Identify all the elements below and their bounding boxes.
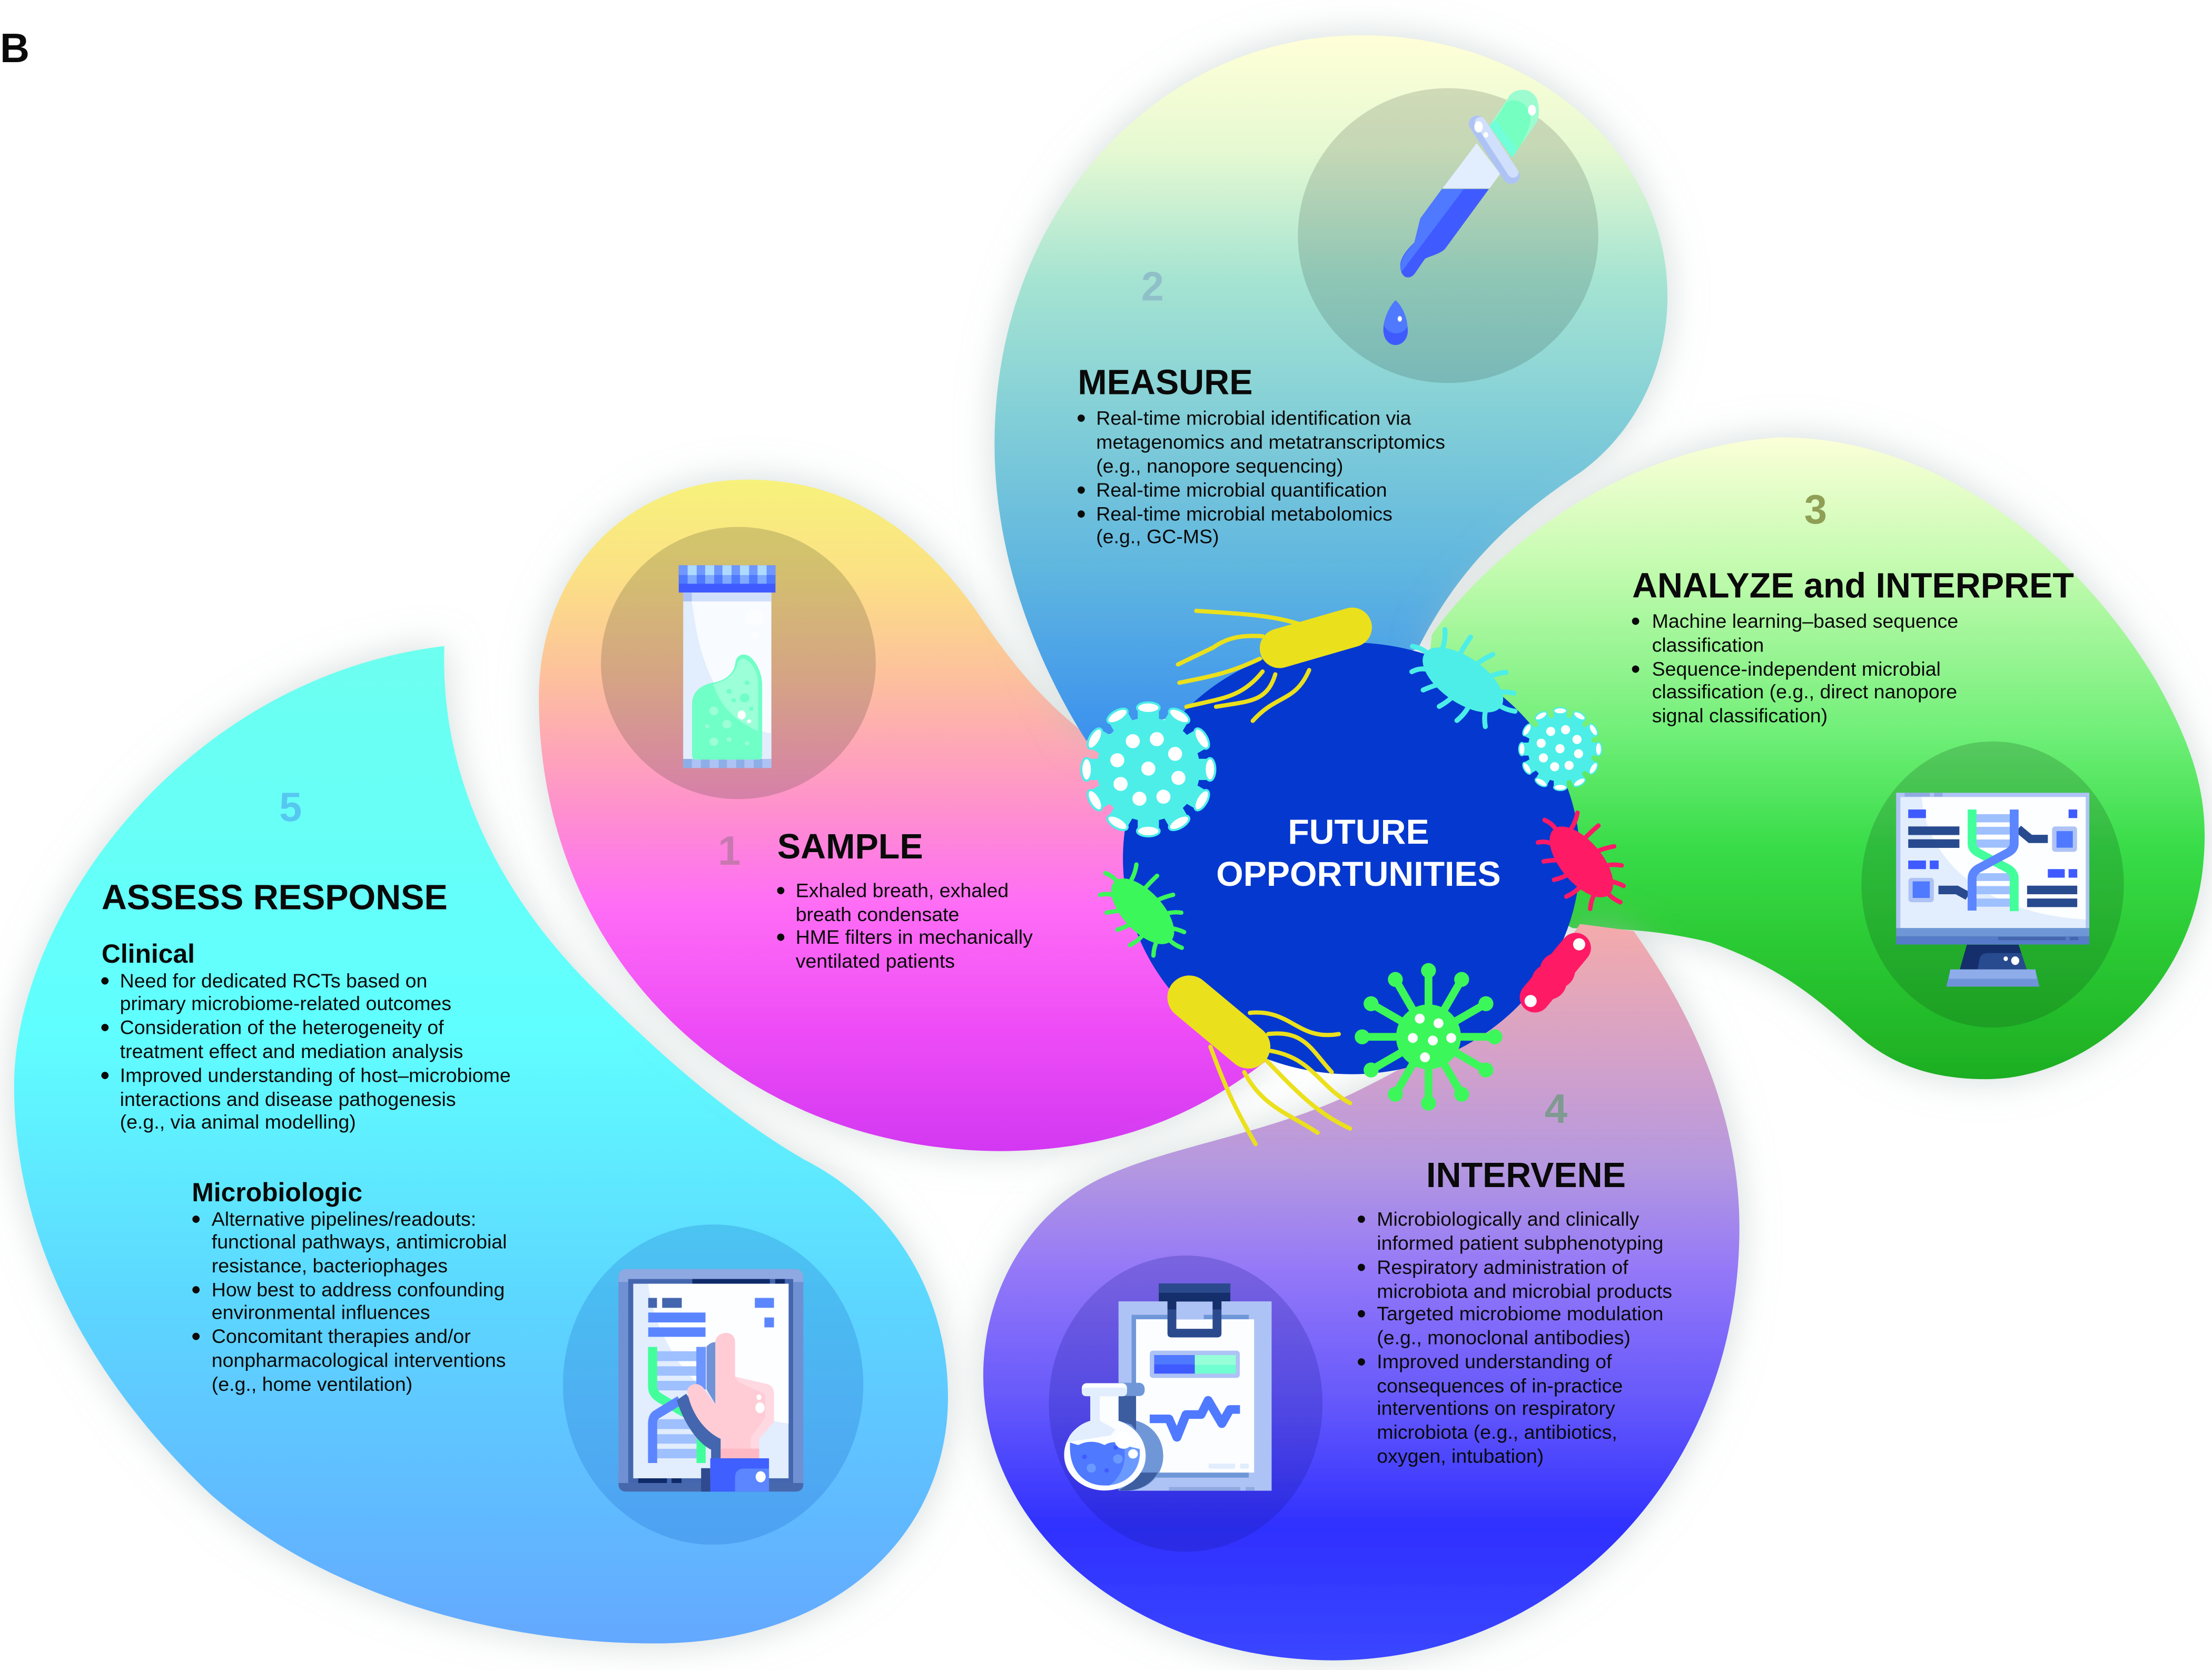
intervene bullet list: • <box>1357 1299 1366 1329</box>
analyze bullet list <box>1631 606 1958 726</box>
microbe: cyan virus left <box>1081 703 1216 836</box>
icon: sample jar <box>679 565 775 768</box>
microbiologic bullet list: environmental influences <box>212 1301 430 1323</box>
analyze bullet list: Machine learning–based sequence <box>1652 610 1958 632</box>
title: future opportunities: FUTURE <box>1288 813 1429 852</box>
sample bullet list <box>776 875 1033 972</box>
sample bullet list: • <box>776 875 785 905</box>
icon: monitor with DNA <box>1896 793 2089 986</box>
intervene bullet list: Microbiologically and clinically <box>1377 1208 1640 1230</box>
panel 3: analyze and interpret <box>1411 437 2205 1079</box>
microbiologic bullet list: Concomitant therapies and/or <box>212 1325 471 1347</box>
sample bullet list: Exhaled breath, exhaled <box>796 880 1009 902</box>
analyze bullet list: Sequence-independent microbial <box>1652 658 1941 680</box>
panel 5: assess response <box>14 646 948 1644</box>
number 1: 1 <box>718 828 740 874</box>
number 3: 3 <box>1804 487 1827 532</box>
panel 1: sample <box>539 480 1270 1151</box>
intervene bullet list: (e.g., monoclonal antibodies) <box>1377 1327 1631 1349</box>
title: future opportunities: OPPORTUNITIES <box>1216 855 1501 894</box>
heading: assess response: ASSESS RESPONSE <box>102 878 448 917</box>
microbiologic bullet list: • <box>191 1204 201 1234</box>
number 4: 4 <box>1545 1086 1567 1132</box>
intervene bullet list: Improved understanding of <box>1377 1350 1612 1372</box>
clinical bullet list: • <box>100 966 110 996</box>
microbe: pink capsule <box>1525 938 1585 1007</box>
measure bullet list: (e.g., GC-MS) <box>1096 525 1219 547</box>
measure bullet list: Real-time microbial identification via <box>1096 407 1411 429</box>
intervene bullet list <box>1357 1204 1672 1467</box>
clinical bullet list: • <box>100 1012 110 1042</box>
sample bullet list: breath condensate <box>796 903 959 925</box>
intervene bullet list: • <box>1357 1347 1366 1377</box>
clinical bullet list: primary microbiome-related outcomes <box>120 992 451 1014</box>
microbe: green bacterium <box>1083 848 1204 972</box>
centre circle: future opportunities <box>1123 643 1580 1074</box>
microbe: yellow bacterium top <box>1178 611 1352 721</box>
icon: clipboard and flask <box>1064 1283 1271 1491</box>
intervene bullet list: interventions on respiratory <box>1377 1397 1615 1419</box>
microbe: yellow bacterium bottom <box>1189 997 1350 1144</box>
icon circle 3 <box>1861 742 2124 1027</box>
panel 4: intervene <box>983 924 1740 1661</box>
microbiologic bullet list: functional pathways, antimicrobial <box>212 1231 507 1253</box>
intervene bullet list: informed patient subphenotyping <box>1377 1232 1663 1254</box>
icon circle 2 <box>1298 88 1598 383</box>
measure bullet list: (e.g., nanopore sequencing) <box>1096 454 1343 477</box>
title: future opportunities <box>1216 813 1501 894</box>
petal 3 shape <box>1411 437 2205 1079</box>
sample bullet list: • <box>776 922 785 952</box>
icon circle 4 <box>1049 1256 1322 1552</box>
panel 2: measure <box>994 35 1667 740</box>
intervene bullet list: • <box>1357 1252 1366 1282</box>
analyze bullet list: signal classification) <box>1652 704 1828 726</box>
subheading: clinical: Clinical <box>102 939 195 969</box>
intervene bullet list: consequences of in-practice <box>1377 1375 1623 1397</box>
analyze bullet list: • <box>1631 606 1641 636</box>
intervene bullet list: oxygen, intubation) <box>1377 1445 1544 1467</box>
measure bullet list: metagenomics and metatranscriptomics <box>1096 431 1445 453</box>
measure bullet list <box>1077 403 1445 547</box>
blue disc <box>1123 643 1580 1074</box>
intervene bullet list: microbiota (e.g., antibiotics, <box>1377 1421 1617 1443</box>
clinical bullet list <box>100 966 511 1133</box>
petal 4 shape <box>983 924 1740 1661</box>
microbiologic bullet list: • <box>191 1321 201 1351</box>
clinical bullet list: Consideration of the heterogeneity of <box>120 1016 444 1038</box>
microbiologic bullet list: resistance, bacteriophages <box>212 1254 448 1277</box>
intervene bullet list: • <box>1357 1204 1366 1234</box>
microbe: cyan bacterium <box>1392 613 1535 745</box>
measure bullet list: Real-time microbial quantification <box>1096 479 1387 501</box>
measure bullet list: • <box>1077 499 1086 529</box>
microbiologic bullet list: nonpharmacological interventions <box>212 1349 506 1371</box>
petal 5 shape <box>14 646 948 1644</box>
clinical bullet list: interactions and disease pathogenesis <box>120 1088 456 1110</box>
clinical bullet list: treatment effect and mediation analysis <box>120 1040 463 1062</box>
clinical bullet list: (e.g., via animal modelling) <box>120 1111 356 1133</box>
sample bullet list: ventilated patients <box>796 950 955 972</box>
petal 1 shape <box>539 480 1270 1151</box>
analyze bullet list: • <box>1631 654 1641 684</box>
intervene bullet list: Respiratory administration of <box>1377 1256 1628 1278</box>
microbiologic bullet list: Alternative pipelines/readouts: <box>212 1208 476 1230</box>
heading: sample: SAMPLE <box>777 827 923 866</box>
sample bullet list: HME filters in mechanically <box>796 926 1033 948</box>
number 5: 5 <box>279 785 302 830</box>
microbe: small cyan virus <box>1519 708 1602 790</box>
subheading: microbiologic: Microbiologic <box>192 1178 362 1207</box>
microbiologic bullet list <box>191 1204 507 1395</box>
intervene bullet list: microbiota and microbial products <box>1377 1280 1672 1302</box>
clinical bullet list: Improved understanding of host–microbiome <box>120 1064 511 1086</box>
microbe: red bacterium <box>1519 796 1645 926</box>
panel label: B: B <box>0 26 29 71</box>
microbe: green virus <box>1355 963 1502 1111</box>
clinical bullet list: Need for dedicated RCTs based on <box>120 970 427 992</box>
petal 2 shape <box>994 35 1667 740</box>
icon circle 5 <box>563 1224 863 1545</box>
heading: intervene: INTERVENE <box>1426 1156 1626 1195</box>
measure bullet list: Real-time microbial metabolomics <box>1096 502 1393 525</box>
heading: measure: MEASURE <box>1078 363 1253 402</box>
icon: tablet with hand and DNA <box>618 1269 803 1491</box>
icon: dropper <box>1384 90 1539 345</box>
number 2: 2 <box>1141 264 1164 310</box>
heading: analyze and interpret: ANALYZE and INTERPRET <box>1632 566 2074 605</box>
clinical bullet list: • <box>100 1060 110 1090</box>
measure bullet list: • <box>1077 475 1086 505</box>
microbiologic bullet list: (e.g., home ventilation) <box>212 1373 412 1395</box>
analyze bullet list: classification (e.g., direct nanopore <box>1652 680 1957 703</box>
measure bullet list: • <box>1077 403 1086 433</box>
microbiologic bullet list: • <box>191 1274 201 1305</box>
analyze bullet list: classification <box>1652 634 1764 656</box>
microbiologic bullet list: How best to address confounding <box>212 1279 505 1301</box>
icon circle 1 <box>601 527 876 799</box>
intervene bullet list: Targeted microbiome modulation <box>1377 1302 1663 1325</box>
